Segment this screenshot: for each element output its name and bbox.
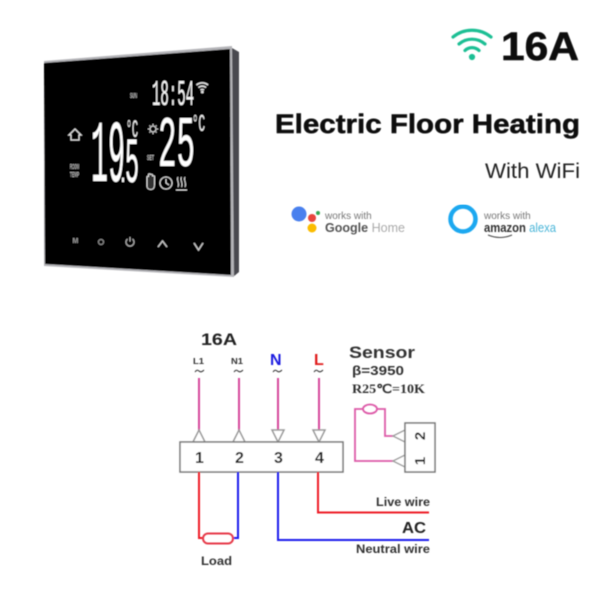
thermostat device: °C [192,112,205,139]
header: wifi and 16A [453,25,579,69]
amazon alexa badge [450,206,556,238]
label N1: N1 [231,357,244,366]
label N: N [270,352,282,369]
neutral wire [278,472,429,540]
button: up [158,241,167,247]
load neutral wire [233,472,238,538]
button: clock [98,240,104,244]
device silver frame [44,46,234,277]
heading 16A: 16A [201,330,237,349]
icon: sun [148,124,158,134]
icon: green wifi [453,30,491,58]
terminal numbers: 2 [235,450,244,467]
button: power [126,237,134,246]
room temperature dot: . [118,158,128,192]
output wires [199,472,429,544]
sensor probe [363,404,377,414]
icon: alexa ring [450,206,476,232]
thermostat device: SUN [130,93,137,100]
thermostat device [44,46,239,277]
label: AC: AC [402,520,426,537]
rating 16A: 16A [501,25,579,69]
thermostat device: TEMP [70,172,79,179]
icon: heating [176,177,187,190]
works with label: works with [483,211,531,222]
terminal block [180,442,343,472]
sensor terminal numbers: 2 [412,432,429,440]
thermostat device: 19 [91,109,125,208]
works with label: works with [324,211,372,222]
label: load: Load [201,554,232,568]
device black glass [44,49,231,275]
label: neutral wire: Neutral wire [356,542,430,556]
label: live wire: Live wire [376,495,430,509]
device side edge [232,48,239,277]
set label: SET [147,155,154,162]
wiring diagram [180,330,435,568]
terminal numbers: 1 [195,450,204,467]
title: Electric Floor Heating [275,109,580,139]
google home badge [292,206,405,235]
button: down [194,243,203,250]
thermostat device: 18:54 [152,75,194,116]
label L1: L1 [193,357,205,366]
thermostat device: 25 [158,106,195,188]
sensor terminal numbers: 1 [412,457,429,465]
sensor resistance value: R25℃=10K [352,382,425,396]
sensor terminal block [405,423,435,472]
sensor heading: Sensor [349,343,415,362]
icon: wifi on display [196,83,208,93]
subtitle: With WiFi [485,159,580,183]
amazon alexa label: amazon alexa [484,221,556,235]
room temp label [70,164,79,179]
thermostat device: 5 [125,130,139,202]
icon: home [69,129,81,140]
tilde marks [195,370,323,372]
terminal numbers: 3 [274,450,283,467]
icon: hand [147,174,154,190]
thermostat device: °C [126,116,138,145]
sensor beta value: β=3950 [352,363,404,378]
label L: L [314,352,324,369]
terminal numbers: 4 [315,450,324,467]
terminal arrows [193,430,325,442]
sensor arrows [393,430,405,467]
touch buttons [72,237,203,250]
thermostat device: ROOM [70,164,79,171]
icon: google assistant [292,206,320,232]
terminal numbers [195,450,324,467]
sensor wiring [355,404,393,461]
icon: clock [160,177,172,189]
google home label: Google Home [325,220,405,235]
button: mode: M [72,238,78,245]
load live wire [199,472,203,538]
live wire [318,472,429,512]
sensor terminal numbers [412,432,429,465]
terminal labels [193,352,324,372]
amazon smile [488,235,512,238]
icon: load element [203,534,233,544]
pink input wires [199,378,319,430]
